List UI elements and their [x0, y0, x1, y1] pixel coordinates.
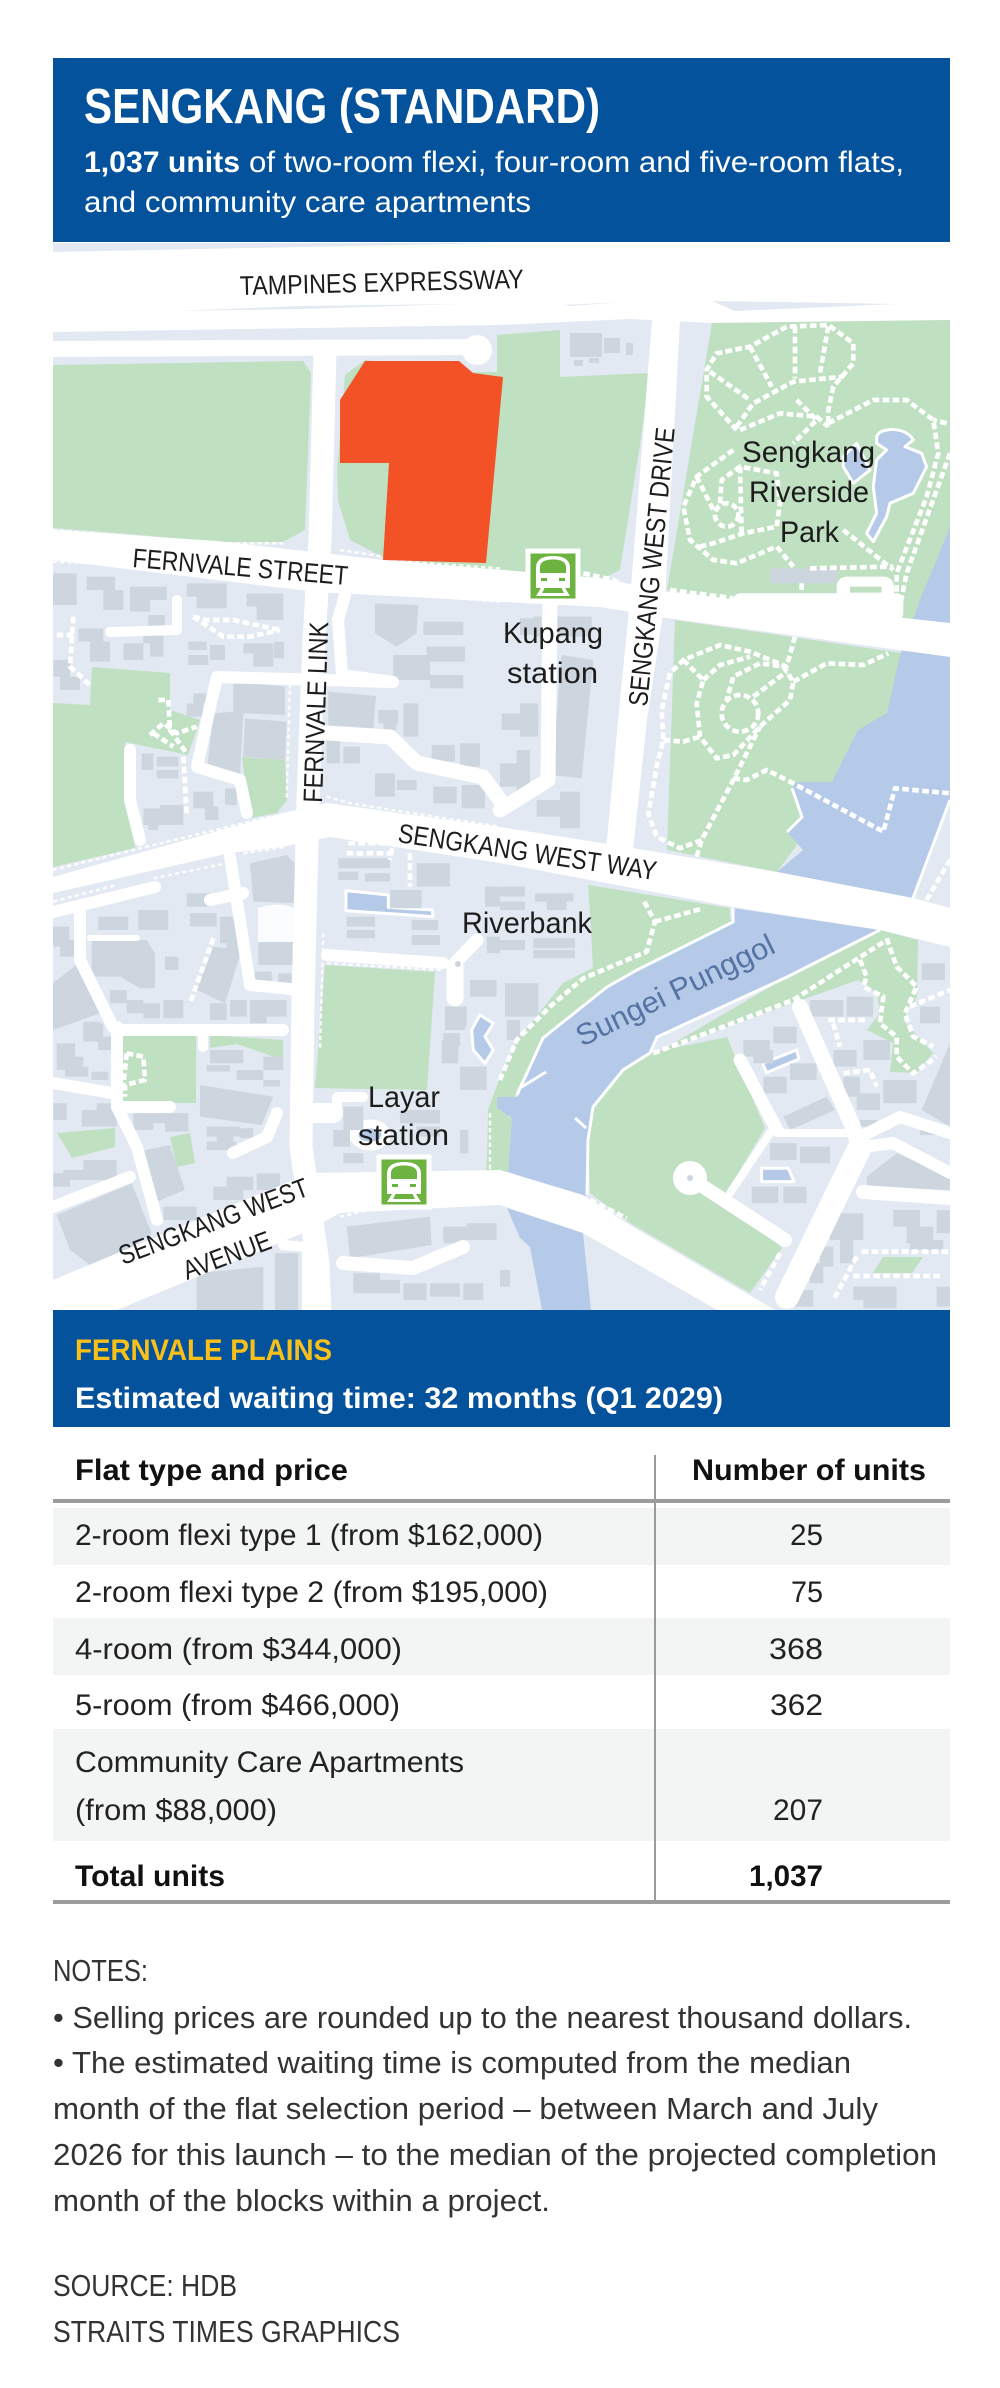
notes: • The estimated waiting time is computed from the median: [53, 2045, 851, 2080]
place labels: Riverbank: [462, 907, 593, 940]
road labels: SENGKANG WEST DRIVE: [623, 426, 681, 708]
subtitle: 1,037 units: [84, 146, 240, 179]
expressway slivers: [53, 243, 897, 311]
total row: Total units: [75, 1860, 225, 1893]
dashed footpaths: [53, 325, 950, 1300]
road labels: [115, 264, 681, 1286]
place labels: Riverside: [749, 476, 869, 509]
road labels: TAMPINES EXPRESSWAY: [239, 264, 524, 301]
map base land: [53, 319, 950, 1310]
table rows: 5-room (from $466,000): [75, 1689, 400, 1722]
buildings: [53, 333, 950, 1310]
notes: 2026 for this launch – to the median of the projected completion: [53, 2137, 937, 2172]
project name: FERNVALE PLAINS: [75, 1334, 332, 1367]
table rows: 207: [773, 1794, 823, 1827]
notes: • Selling prices are rounded up to the nearest thousand dollars.: [53, 2000, 912, 2035]
place labels: Kupang: [503, 617, 603, 650]
table header: [75, 1454, 926, 1487]
subtitle: of two-room flexi, four-room and five-room flats,: [249, 146, 904, 179]
source credit: SOURCE: HDB: [53, 2268, 237, 2303]
place labels: Sengkang: [742, 436, 875, 469]
table rows: Community Care Apartments: [75, 1746, 464, 1779]
subtitle: [84, 146, 904, 219]
total row: 1,037: [749, 1860, 823, 1893]
place labels: station: [358, 1119, 449, 1152]
source credit: [53, 2268, 400, 2349]
panel: project band: [53, 1310, 950, 1427]
roads: [53, 320, 950, 1315]
table rows: (from $88,000): [75, 1794, 277, 1827]
road labels: AVENUE: [179, 1225, 275, 1286]
road labels: FERNVALE STREET: [131, 543, 349, 591]
table rows: 362: [770, 1689, 823, 1722]
notes: NOTES:: [53, 1953, 148, 1988]
notes: month of the blocks within a project.: [53, 2183, 550, 2218]
panel: header: [53, 58, 950, 242]
table rows: 2-room flexi type 2 (from $195,000): [75, 1576, 548, 1609]
green areas: [53, 320, 950, 1293]
notes: month of the flat selection period – between March and July: [53, 2091, 878, 2126]
title: SENGKANG (STANDARD): [84, 80, 600, 134]
place labels: Sungei Punggol: [571, 929, 780, 1053]
notes: [53, 1953, 937, 2218]
road labels: FERNVALE LINK: [298, 621, 334, 803]
table rows: 75: [791, 1576, 823, 1609]
table rows: 25: [790, 1519, 823, 1552]
table header: Flat type and price: [75, 1454, 348, 1487]
table rows: [75, 1519, 823, 1827]
place labels: Layar: [368, 1081, 440, 1114]
table rows: 4-room (from $344,000): [75, 1633, 402, 1666]
road labels: SENGKANG WEST WAY: [396, 818, 659, 886]
source credit: STRAITS TIMES GRAPHICS: [53, 2314, 400, 2349]
table header: Number of units: [692, 1454, 926, 1487]
site footprint: Fernvale Plains: [340, 361, 503, 563]
water: Sungei Punggol and ponds: [346, 430, 950, 1310]
table rows: 368: [769, 1633, 823, 1666]
subtitle: and community care apartments: [84, 186, 531, 219]
table: flat types and units: [53, 1454, 950, 1904]
panel: map: [53, 243, 950, 1315]
place labels: Park: [780, 516, 840, 549]
place labels: [358, 436, 875, 1152]
icon: Layar station train: [379, 1157, 429, 1207]
waiting time: Estimated waiting time: 32 months (Q1 2029): [75, 1382, 723, 1415]
icon: Kupang station train: [528, 551, 578, 601]
place labels: station: [507, 657, 598, 690]
total row: [75, 1860, 823, 1893]
table rows: 2-room flexi type 1 (from $162,000): [75, 1519, 543, 1552]
road labels: SENGKANG WEST: [115, 1172, 312, 1271]
